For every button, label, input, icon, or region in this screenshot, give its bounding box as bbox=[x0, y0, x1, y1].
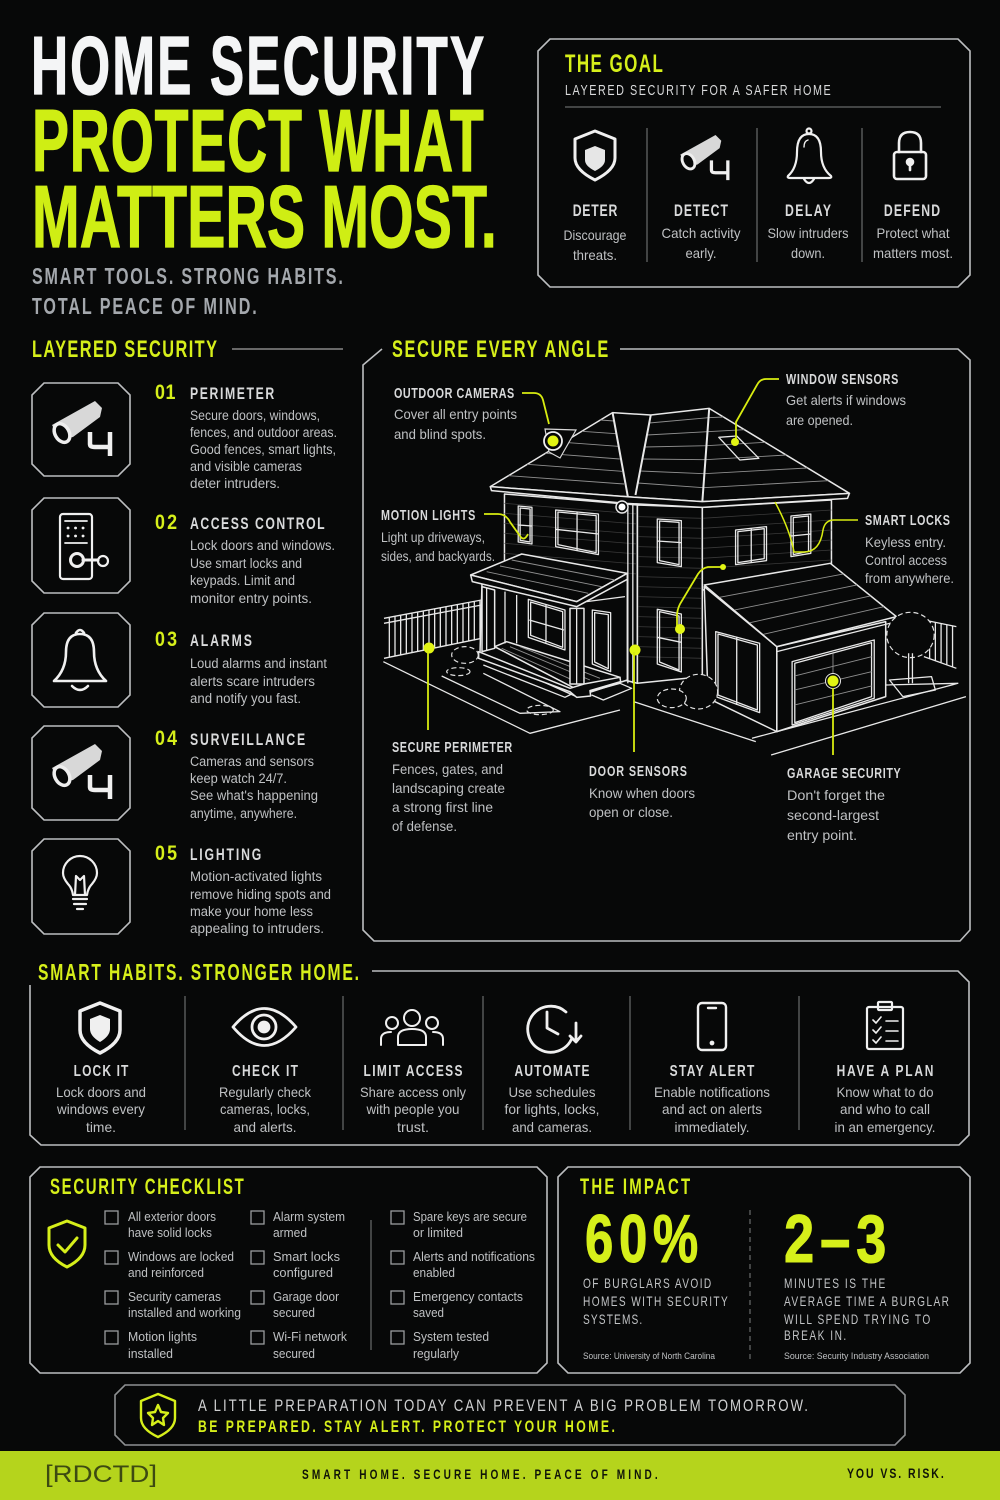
callout: smart locks: SMART LOCKS bbox=[865, 511, 950, 528]
checklist column 3: Alerts and notifications bbox=[413, 1250, 535, 1264]
callout: garage security: Don't forget the bbox=[787, 787, 885, 803]
habit: check it bbox=[219, 1008, 312, 1135]
impact heading: THE IMPACT bbox=[580, 1174, 691, 1199]
habit: stay alert bbox=[654, 1003, 770, 1135]
checklist column 3: Emergency contacts bbox=[413, 1290, 523, 1304]
habit: limit access: Share access only bbox=[360, 1084, 466, 1100]
checklist column 3: or limited bbox=[413, 1226, 463, 1240]
stat: 60 percent: OF BURGLARS AVOID bbox=[583, 1276, 712, 1291]
title: PROTECT WHAT bbox=[32, 91, 484, 190]
title: HOME SECURITY bbox=[31, 18, 484, 112]
stat: 2 to 3 minutes bbox=[784, 1201, 949, 1362]
checklist column 1: Security cameras bbox=[128, 1290, 221, 1304]
panel: layered security bbox=[32, 336, 343, 936]
checklist column 3 bbox=[391, 1210, 535, 1361]
habit: automate: AUTOMATE bbox=[514, 1061, 590, 1079]
callout: secure perimeter bbox=[392, 642, 513, 834]
item: perimeter: Secure doors, windows, bbox=[190, 408, 320, 423]
item: access control: 02 bbox=[155, 511, 177, 534]
callout: motion lights: Light up driveways, bbox=[381, 529, 485, 545]
callout banner bbox=[115, 1385, 905, 1445]
item: access control bbox=[32, 498, 335, 606]
stat: 60 percent: Source: University of North Carolina bbox=[583, 1351, 716, 1362]
panel: the impact bbox=[558, 1167, 970, 1373]
logo: [RDCTD] bbox=[45, 1461, 157, 1488]
checklist column 1: installed and working bbox=[128, 1306, 241, 1320]
stat: 2 to 3 minutes: MINUTES IS THE bbox=[784, 1276, 885, 1291]
callout: motion lights bbox=[381, 506, 528, 564]
column: detect: early. bbox=[686, 245, 716, 261]
item: perimeter bbox=[32, 381, 337, 491]
stat: 2 to 3 minutes: BREAK IN. bbox=[784, 1328, 846, 1343]
item: lighting: 05 bbox=[155, 842, 177, 865]
habit: have a plan: Know what to do bbox=[836, 1084, 934, 1100]
column: deter bbox=[564, 202, 627, 263]
column: deter: DETER bbox=[573, 202, 618, 221]
callout: window sensors: are opened. bbox=[786, 412, 853, 428]
secure every angle heading: SECURE EVERY ANGLE bbox=[392, 336, 608, 363]
column: delay: DELAY bbox=[785, 202, 831, 221]
habit: automate: for lights, locks, bbox=[504, 1101, 600, 1117]
item: alarms: alerts scare intruders bbox=[190, 674, 315, 689]
callout: door sensors: open or close. bbox=[589, 804, 673, 820]
checklist column 2: Garage door bbox=[273, 1290, 339, 1304]
habit: stay alert: and act on alerts bbox=[662, 1101, 762, 1117]
callout: secure perimeter: Fences, gates, and bbox=[392, 761, 503, 777]
item: alarms bbox=[32, 613, 327, 707]
habit: lock it: time. bbox=[86, 1119, 116, 1135]
panel: security checklist bbox=[30, 1167, 547, 1373]
habit: limit access: with people you bbox=[366, 1101, 460, 1117]
callout: secure perimeter: SECURE PERIMETER bbox=[392, 738, 513, 755]
item: access control: keypads. Limit and bbox=[190, 573, 295, 588]
callout: garage security: second-largest bbox=[787, 807, 879, 823]
callout: window sensors: Get alerts if windows bbox=[786, 392, 906, 408]
item: alarms: ALARMS bbox=[190, 632, 252, 651]
checklist column 2: Alarm system bbox=[273, 1210, 345, 1224]
item: alarms: Loud alarms and instant bbox=[190, 656, 327, 671]
habit: have a plan: and who to call bbox=[840, 1101, 930, 1117]
callout: side window marker bbox=[675, 564, 726, 634]
callout: outdoor cameras: and blind spots. bbox=[394, 426, 486, 442]
stat: 60 percent: HOMES WITH SECURITY bbox=[583, 1294, 728, 1309]
habit: limit access: LIMIT ACCESS bbox=[363, 1061, 463, 1079]
callout: motion lights: MOTION LIGHTS bbox=[381, 506, 476, 523]
column: delay bbox=[768, 202, 848, 261]
callout: secure perimeter: a strong first line bbox=[392, 799, 493, 815]
habit: automate: and cameras. bbox=[512, 1119, 592, 1135]
item: access control: monitor entry points. bbox=[190, 591, 312, 606]
item: access control: ACCESS CONTROL bbox=[190, 515, 325, 534]
checklist column 2: Wi-Fi network bbox=[273, 1330, 348, 1344]
house illustration bbox=[383, 408, 966, 755]
stat: 2 to 3 minutes: AVERAGE TIME A BURGLAR bbox=[784, 1294, 949, 1309]
subtitle: SMART TOOLS. STRONG HABITS. bbox=[32, 264, 343, 290]
column: deter: Discourage bbox=[564, 227, 627, 243]
habit: have a plan: in an emergency. bbox=[834, 1119, 936, 1135]
item: lighting: remove hiding spots and bbox=[190, 887, 331, 902]
stat: 2 to 3 minutes: WILL SPEND TRYING TO bbox=[784, 1312, 930, 1327]
checklist column 3: System tested bbox=[413, 1330, 489, 1344]
item: alarms: 03 bbox=[155, 628, 177, 651]
callout: door sensors: DOOR SENSORS bbox=[589, 762, 687, 779]
checklist column 2: secured bbox=[273, 1347, 315, 1361]
item: perimeter: PERIMETER bbox=[190, 385, 274, 404]
habit: check it: Regularly check bbox=[219, 1084, 312, 1100]
item: surveillance: 04 bbox=[155, 727, 177, 750]
subtitle bbox=[32, 264, 343, 320]
item: perimeter: fences, and outdoor areas. bbox=[190, 425, 337, 440]
item: surveillance: See what's happening bbox=[190, 788, 318, 803]
banner text bbox=[198, 1397, 808, 1437]
column: detect: Catch activity bbox=[662, 225, 740, 241]
item: lighting: appealing to intruders. bbox=[190, 921, 324, 936]
icon: shield bbox=[575, 131, 615, 180]
habit: have a plan: HAVE A PLAN bbox=[837, 1061, 933, 1079]
callout: outdoor cameras bbox=[394, 384, 549, 442]
habit: lock it: windows every bbox=[56, 1101, 145, 1117]
callout: smart locks bbox=[775, 502, 954, 586]
habit: lock it: LOCK IT bbox=[74, 1061, 129, 1079]
checklist column 1: All exterior doors bbox=[128, 1210, 216, 1224]
habit: lock it bbox=[56, 1003, 146, 1135]
item: perimeter: deter intruders. bbox=[190, 476, 280, 491]
callout: camera hardware bbox=[544, 429, 576, 458]
column: defend: Protect what bbox=[876, 225, 950, 241]
checklist column 1: have solid locks bbox=[128, 1226, 212, 1240]
column: deter: threats. bbox=[573, 247, 617, 263]
callout: outdoor cameras: OUTDOOR CAMERAS bbox=[394, 384, 514, 401]
habit: stay alert: immediately. bbox=[674, 1119, 750, 1135]
icon: padlock bbox=[894, 132, 926, 179]
checklist column 1 bbox=[105, 1210, 241, 1361]
item: lighting: make your home less bbox=[190, 904, 313, 919]
item: surveillance: SURVEILLANCE bbox=[190, 731, 305, 750]
callout: secure perimeter: landscaping create bbox=[392, 780, 505, 796]
callout: outdoor cameras: Cover all entry points bbox=[394, 406, 517, 422]
stat: 60 percent: SYSTEMS. bbox=[583, 1312, 642, 1327]
footer right text: YOU VS. RISK. bbox=[847, 1466, 944, 1481]
stat: 60 percent: 60% bbox=[585, 1201, 698, 1277]
callout: window sensors: WINDOW SENSORS bbox=[786, 370, 899, 387]
item: lighting: Motion-activated lights bbox=[190, 869, 322, 884]
item: access control: Use smart locks and bbox=[190, 556, 302, 571]
column: defend: matters most. bbox=[873, 245, 953, 261]
title: MATTERS MOST. bbox=[32, 168, 497, 266]
item: surveillance bbox=[32, 726, 318, 821]
habit: stay alert: Enable notifications bbox=[654, 1084, 770, 1100]
callout: motion lights: sides, and backyards. bbox=[381, 548, 495, 564]
callout: smart locks: from anywhere. bbox=[865, 570, 954, 586]
column: defend: DEFEND bbox=[884, 202, 940, 221]
habit: check it: CHECK IT bbox=[232, 1061, 298, 1079]
habit: automate bbox=[504, 1006, 600, 1135]
icon: camera bbox=[679, 135, 729, 180]
banner text: BE PREPARED. STAY ALERT. PROTECT YOUR HOME. bbox=[198, 1418, 615, 1437]
habit: check it: cameras, locks, bbox=[220, 1101, 310, 1117]
callout: smart locks: Control access bbox=[865, 552, 947, 568]
checklist column 3: enabled bbox=[413, 1266, 455, 1280]
checklist column 1: installed bbox=[128, 1347, 173, 1361]
callout: garage security: GARAGE SECURITY bbox=[787, 764, 901, 781]
column: detect bbox=[662, 202, 740, 261]
habit: automate: Use schedules bbox=[508, 1084, 596, 1100]
checklist column 2 bbox=[251, 1210, 348, 1361]
panel: secure every angle bbox=[363, 336, 970, 941]
checklist column 2: armed bbox=[273, 1226, 307, 1240]
column: delay: Slow intruders bbox=[768, 225, 848, 241]
habit: check it: and alerts. bbox=[234, 1119, 296, 1135]
habit: limit access: trust. bbox=[397, 1119, 429, 1135]
checklist column 1: and reinforced bbox=[128, 1266, 204, 1280]
callout: garage security bbox=[787, 674, 901, 843]
stat: 2 to 3 minutes: Source: Security Industry Association bbox=[784, 1351, 929, 1362]
checklist column 3: regularly bbox=[413, 1347, 460, 1361]
habit: limit access bbox=[360, 1010, 466, 1135]
panel: the goal bbox=[538, 39, 970, 287]
checklist column 2: configured bbox=[273, 1266, 333, 1280]
item: surveillance: keep watch 24/7. bbox=[190, 771, 287, 786]
layered security heading: LAYERED SECURITY bbox=[32, 336, 217, 363]
stat: 60 percent bbox=[583, 1201, 728, 1362]
icon: bell bbox=[788, 128, 831, 183]
icon: shield star bbox=[141, 1394, 175, 1437]
column: defend bbox=[873, 202, 953, 261]
item: alarms: and notify you fast. bbox=[190, 691, 301, 706]
item: surveillance: Cameras and sensors bbox=[190, 754, 314, 769]
banner text: A LITTLE PREPARATION TODAY CAN PREVENT A BIG PROBLEM TOMORROW. bbox=[198, 1397, 808, 1415]
item: lighting bbox=[32, 839, 331, 936]
item: surveillance: anytime, anywhere. bbox=[190, 806, 297, 821]
smart habits heading: SMART HABITS. STRONGER HOME. bbox=[38, 960, 359, 986]
checklist column 1: Motion lights bbox=[128, 1330, 197, 1344]
column: detect: DETECT bbox=[674, 202, 728, 221]
callout: secure perimeter: of defense. bbox=[392, 818, 457, 834]
item: perimeter: and visible cameras bbox=[190, 459, 302, 474]
checklist column 2: secured bbox=[273, 1306, 315, 1320]
subtitle: TOTAL PEACE OF MIND. bbox=[32, 294, 257, 320]
habit: have a plan bbox=[834, 1002, 936, 1135]
callout: door sensors: Know when doors bbox=[589, 785, 695, 801]
callout: porch light bbox=[616, 501, 628, 513]
habit: lock it: Lock doors and bbox=[56, 1084, 146, 1100]
item: access control: Lock doors and windows. bbox=[190, 538, 335, 553]
footer bar bbox=[0, 1451, 1000, 1500]
title bbox=[31, 18, 497, 266]
callout: door sensors bbox=[589, 644, 695, 820]
checklist column 3: Spare keys are secure bbox=[413, 1210, 527, 1224]
stat: 2 to 3 minutes: 2–3 bbox=[784, 1201, 886, 1277]
checklist column 3: saved bbox=[413, 1306, 444, 1320]
item: perimeter: 01 bbox=[155, 381, 176, 404]
goal heading: THE GOAL bbox=[565, 50, 663, 78]
callout: garage security: entry point. bbox=[787, 827, 857, 843]
panel: smart habits bbox=[30, 960, 969, 1145]
footer tagline: SMART HOME. SECURE HOME. PEACE OF MIND. bbox=[302, 1466, 658, 1482]
habit: stay alert: STAY ALERT bbox=[670, 1061, 755, 1079]
item: lighting: LIGHTING bbox=[190, 846, 261, 865]
goal subheading: LAYERED SECURITY FOR A SAFER HOME bbox=[565, 81, 831, 98]
icon: shield check bbox=[49, 1221, 85, 1267]
callout: window sensors bbox=[731, 370, 906, 446]
callout: smart locks: Keyless entry. bbox=[865, 534, 946, 550]
checklist column 2: Smart locks bbox=[273, 1250, 340, 1264]
checklist heading: SECURITY CHECKLIST bbox=[50, 1174, 244, 1199]
item: perimeter: Good fences, smart lights, bbox=[190, 442, 336, 457]
checklist column 1: Windows are locked bbox=[128, 1250, 234, 1264]
column: delay: down. bbox=[791, 245, 825, 261]
